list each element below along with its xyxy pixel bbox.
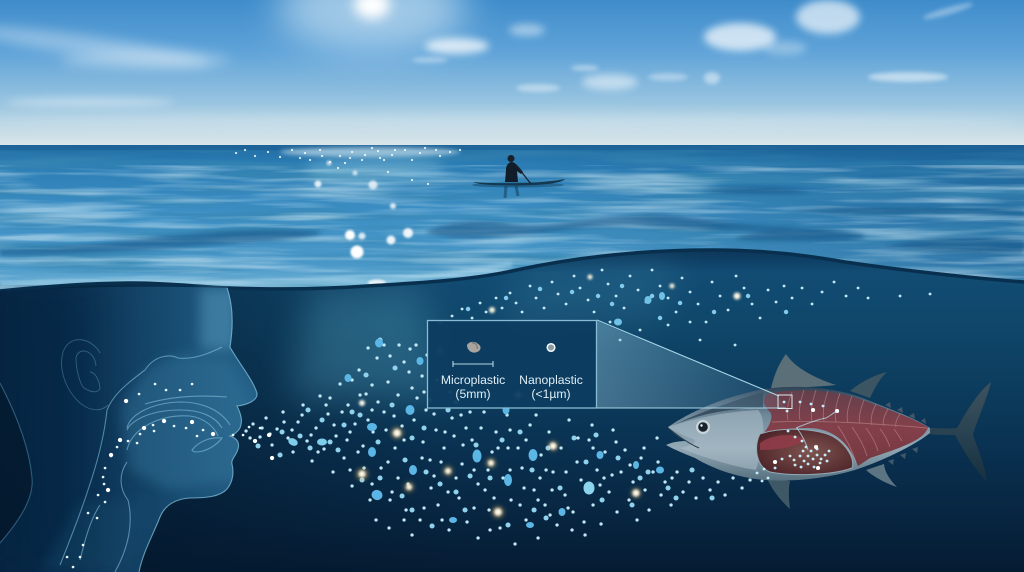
particles in fish <box>757 402 829 481</box>
microplastic label: Microplastic <box>441 373 505 387</box>
sky <box>0 0 1024 146</box>
clouds <box>0 0 1020 130</box>
light shafts <box>290 255 680 400</box>
nanoplastic label: Nanoplastic <box>519 373 583 387</box>
rib lines <box>772 390 927 462</box>
gill organ <box>760 435 806 450</box>
medium particles <box>258 340 712 526</box>
microplastic particle cloud <box>67 270 930 567</box>
scale bar <box>453 361 493 367</box>
fish body <box>666 387 930 481</box>
callout: zoom wedge <box>597 320 792 408</box>
human head cross-section <box>0 285 257 572</box>
upper particle drift <box>440 270 930 345</box>
large blue flakes <box>287 338 664 528</box>
stomach cavity <box>757 429 853 475</box>
small particles <box>246 345 750 544</box>
tuna with exposed anatomy <box>666 354 991 509</box>
sun glow <box>277 0 467 50</box>
callout: particle sizes <box>428 320 596 408</box>
ocean surface <box>0 145 1024 296</box>
finlets along back and belly <box>885 402 926 465</box>
eye <box>696 420 710 434</box>
dark swells <box>0 187 1024 256</box>
ventral fin <box>767 478 790 509</box>
mouth line <box>668 428 699 448</box>
second dorsal fin <box>850 372 887 398</box>
dorsal fin <box>771 354 836 388</box>
nasal cavity and mouth <box>60 347 230 572</box>
head highlights <box>668 410 763 470</box>
nanoplastic sample <box>547 344 555 351</box>
underwater <box>0 250 1024 572</box>
paddleboarder <box>472 155 565 198</box>
ear <box>62 340 108 410</box>
magnified area marker <box>778 395 792 408</box>
anal fin <box>866 464 897 487</box>
muscle panel <box>764 390 928 466</box>
tail fin <box>928 382 991 482</box>
bright amber-white particles <box>356 391 641 518</box>
particles inside head <box>67 384 260 567</box>
microplastic sample <box>467 342 481 353</box>
nanoplastic label: (<1µm) <box>531 387 571 401</box>
microplastic label: (5mm) <box>455 387 491 401</box>
sun glints on the water <box>236 148 460 286</box>
